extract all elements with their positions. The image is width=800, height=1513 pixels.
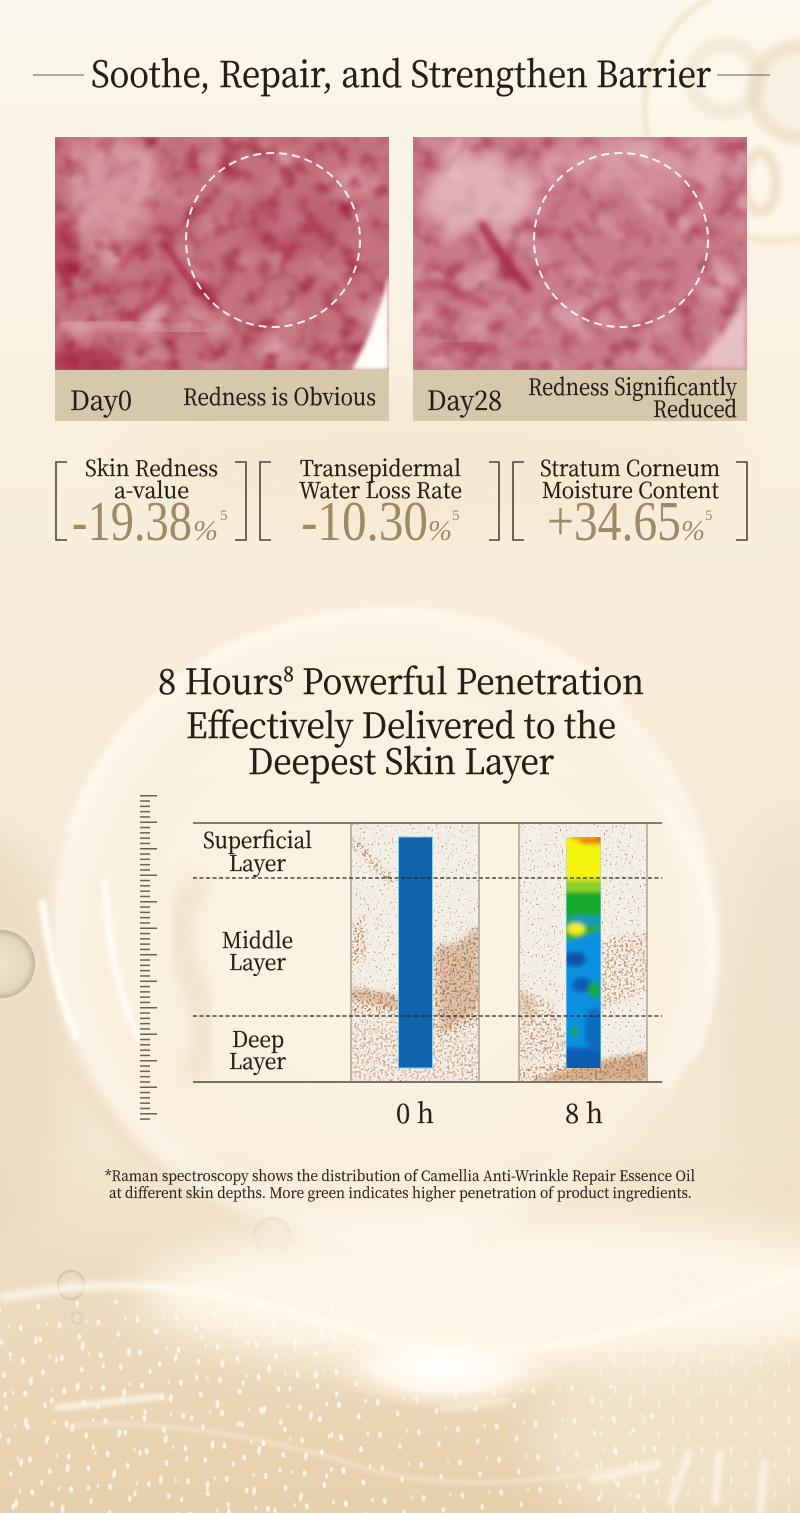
caption bar: Day28	[413, 369, 747, 424]
label: superficial layer: Superficial	[203, 824, 312, 855]
stat: moisture content: +34.65	[547, 491, 681, 553]
dashed circle	[186, 153, 360, 327]
stat: skin redness: %	[193, 516, 218, 547]
label: superficial layer: Layer	[229, 847, 287, 878]
stat: moisture content: Stratum Corneum	[540, 452, 720, 483]
label: deep layer: Layer	[229, 1045, 287, 1076]
label: 0 h: 0 h	[396, 1092, 434, 1131]
stat: water loss	[260, 452, 499, 553]
caption bar: Day28: Day28	[427, 379, 502, 418]
stat: skin redness	[56, 452, 246, 553]
panel: Day 28 skin photo	[413, 137, 747, 370]
stat: moisture content: Moisture Content	[542, 474, 719, 505]
footnote: *Raman spectroscopy shows the distribution of Camellia Anti-Wrinkle Repair Essence Oil	[105, 1165, 695, 1186]
stat: water loss: %	[428, 516, 452, 547]
heading: penetration: Powerful Penetration	[294, 655, 644, 705]
caption bar: Day0: Redness is Obvious	[183, 379, 376, 412]
stat: water loss: -10.30	[301, 491, 428, 553]
layer divider lines	[193, 823, 662, 1082]
caption bar: Day28: Redness Significantly	[528, 369, 737, 402]
column: 8 h tissue	[519, 824, 647, 1081]
dashed circle	[534, 153, 708, 327]
footnote	[105, 1165, 695, 1203]
decorative large water bubble	[42, 605, 725, 1255]
stat: moisture content: %	[681, 516, 705, 547]
ruler	[140, 795, 158, 1123]
heading: penetration: 8	[283, 658, 294, 687]
heading: penetration	[158, 655, 644, 785]
stat: moisture content: 5	[705, 508, 712, 524]
bottom golden light wave with dots	[0, 1215, 800, 1513]
decorative bubbles top right	[645, 0, 800, 240]
heading: penetration: Effectively Delivered to the	[186, 699, 616, 749]
caption bar: Day0: Day0	[70, 379, 132, 418]
label: middle layer	[222, 924, 293, 977]
heading: penetration: 8 Hours	[158, 655, 291, 705]
stat: skin redness: Skin Redness	[85, 452, 218, 483]
caption bar: Day28: Reduced	[653, 391, 737, 424]
bar: 8 h	[566, 837, 601, 1068]
stat: skin redness: -19.38	[72, 491, 192, 553]
label: middle layer: Layer	[229, 946, 287, 977]
label: superficial layer	[203, 824, 312, 878]
bar: 0 h	[398, 837, 432, 1068]
chart: Raman depth comparison	[193, 823, 662, 1131]
label: 8 h: 8 h	[565, 1092, 603, 1131]
panel: Day 0 skin photo	[45, 137, 389, 376]
column: 0 h tissue	[351, 824, 479, 1081]
caption bar: Day0	[55, 370, 389, 421]
title: Soothe, Repair, and Strengthen Barrier	[91, 47, 711, 98]
stat: water loss: Water Loss Rate	[299, 474, 462, 505]
decorative droplets	[0, 928, 700, 1325]
stat: moisture content	[513, 452, 747, 553]
label: deep layer: Deep	[232, 1023, 284, 1054]
stat: water loss: Transepidermal	[300, 452, 461, 483]
heading: penetration: Deepest Skin Layer	[248, 735, 554, 785]
footnote: at different skin depths. More green indicates higher penetration of product ingredients.	[109, 1182, 692, 1203]
stat: skin redness: a-value	[114, 474, 189, 505]
stat: skin redness: 5	[220, 508, 228, 524]
label: middle layer: Middle	[222, 924, 293, 955]
stat: water loss: 5	[452, 508, 460, 524]
label: deep layer	[229, 1023, 287, 1076]
